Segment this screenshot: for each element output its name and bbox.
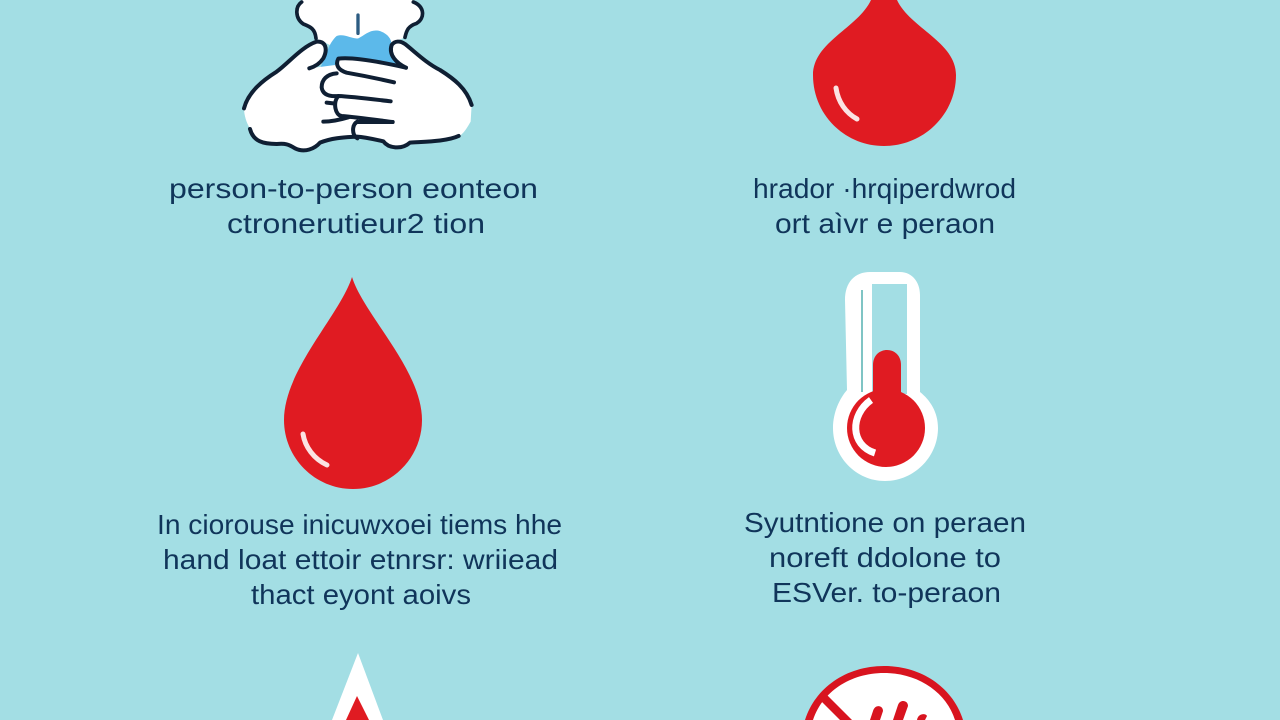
text: top right drop caption — [753, 173, 1016, 239]
text: thermometer caption: Syutntione on peraen — [744, 507, 1026, 538]
icon: warning triangle bottom left — [332, 653, 383, 720]
icon: blood drop middle left — [284, 277, 422, 489]
icon: prohibition sign bottom right — [805, 666, 963, 720]
text: thermometer caption — [744, 507, 1026, 608]
text: middle left drop caption: In ciorouse inicuwxoei tiems hhe — [157, 509, 562, 540]
icon: thermometer — [833, 272, 938, 481]
text: middle left drop caption — [157, 509, 562, 610]
text: top right drop caption: hrador ·hrqiperdwrod — [753, 173, 1016, 204]
text: hand icon caption — [169, 173, 538, 239]
text: middle left drop caption: thact eyont aoivs — [251, 579, 471, 610]
text: top right drop caption: ort aìvr e peraon — [775, 208, 995, 239]
text: thermometer caption: ESVer. to-peraon — [772, 577, 1001, 608]
text: hand icon caption: person-to-person eonteon — [169, 173, 538, 204]
text: thermometer caption: noreft ddolone to — [769, 542, 1001, 573]
icon: blood drop top right — [813, 0, 956, 146]
text: middle left drop caption: hand loat ettoir etnrsr: wriiead — [163, 544, 558, 575]
text: hand icon caption: ctronerutieur2 tion — [227, 208, 485, 239]
icon: hands washing with soap — [244, 0, 472, 150]
